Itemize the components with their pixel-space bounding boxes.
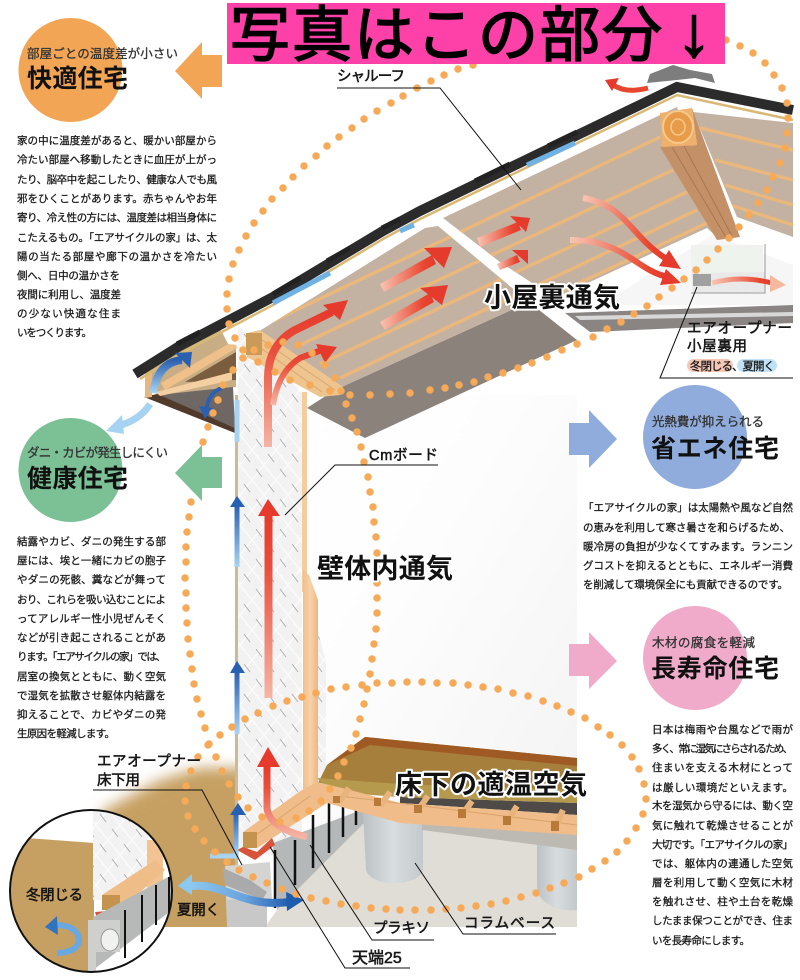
label: winter closed: 冬閉じる xyxy=(26,887,83,904)
callout: attic air opener xyxy=(660,287,793,378)
callout: attic air opener: 小屋裏用 xyxy=(687,338,747,355)
heading: 健康住宅 xyxy=(27,465,128,493)
roof underside left with rafters xyxy=(260,226,513,386)
foundation with vents xyxy=(223,803,367,927)
arrow pointing left xyxy=(175,445,222,501)
body text xyxy=(652,723,794,947)
column bases xyxy=(363,812,577,910)
label: summer open: 夏開く xyxy=(177,903,220,919)
arrow pointing left xyxy=(175,42,222,99)
callout: tenba 25 xyxy=(270,847,410,968)
arrow pointing right xyxy=(569,410,617,468)
body text: いを長寿命にします。 xyxy=(652,934,750,947)
body text xyxy=(17,535,166,740)
arrow: wall main xyxy=(258,499,280,698)
body text: 暖冷房の負担が少なくてすみます。ランニン xyxy=(583,540,793,553)
callout: Cm board xyxy=(285,447,438,515)
body text: 大切です。「エアサイクルの家」 xyxy=(652,838,793,851)
gable lattice wall xyxy=(600,235,793,305)
arrow: long curve 2 xyxy=(570,240,681,285)
inset detail circle xyxy=(9,809,173,973)
body text: グコストを抑えるとともに、エネルギー消費 xyxy=(583,559,793,572)
body text: 住まいを支える木材にとって xyxy=(652,761,793,774)
subtitle: 木材の腐食を軽減 xyxy=(652,635,755,650)
arrow: eave intake curving up xyxy=(153,352,192,393)
roof shingles xyxy=(135,87,793,379)
callout: Cm board: Cmボード xyxy=(369,447,438,464)
circle badge xyxy=(18,18,122,122)
inset winter arrow xyxy=(45,916,79,953)
body text xyxy=(583,501,794,591)
arrow: foundation intake upward xyxy=(210,803,246,856)
callout: underfloor air opener: エアオープナー xyxy=(97,753,201,770)
inset sill sealer xyxy=(95,911,104,916)
body text xyxy=(17,134,218,339)
body text: は厳しい環境だといえます。 xyxy=(652,781,793,794)
arrow: rafter 4 xyxy=(497,250,528,270)
callout: attic air opener: 冬閉じる、夏開く xyxy=(690,359,775,373)
body text: したまま保つことができ、住ま xyxy=(652,914,793,927)
arrow pointing right xyxy=(569,632,617,689)
body text: やダニの死骸、糞などが舞って xyxy=(17,573,166,586)
body text: 生原因を軽減します。 xyxy=(17,727,115,740)
callout: sha roof: シャルーフ xyxy=(337,69,405,85)
arrow: through air opener xyxy=(712,275,786,292)
panel: healthy house xyxy=(17,418,222,740)
title banner: 写真はこの部分 xyxy=(230,2,662,69)
subtitle: 部屋ごとの温度差が小さい xyxy=(27,46,178,61)
arrow: soffit small xyxy=(199,388,222,419)
body text: いをつくります。 xyxy=(17,327,92,339)
callout: column base: コラムベース xyxy=(464,916,555,932)
soil xyxy=(94,758,235,927)
body text: で湿気を拡散させ躯体内結露を xyxy=(17,689,166,702)
body text: たり、脳卒中を起こしたり、健康な人でも風 xyxy=(17,173,218,186)
dotted circles xyxy=(185,40,788,910)
arrow: outer wall middle xyxy=(230,496,245,567)
inset foundation xyxy=(93,875,172,970)
inset stud xyxy=(147,840,163,890)
arrow: lower wall xyxy=(257,747,307,837)
callout: underfloor air opener xyxy=(93,753,242,865)
heading: 長寿命住宅 xyxy=(651,655,779,683)
body text: 多く、常に湿気にさらされるため、 xyxy=(652,742,793,755)
label: underfloor air: 床下の適温空気 xyxy=(395,770,587,800)
arrow: outer wall lower xyxy=(230,661,245,734)
panel: energy saving house xyxy=(569,385,794,591)
arrow: rafter 2 xyxy=(380,285,448,330)
ridge vent xyxy=(647,65,715,83)
ridge beam xyxy=(660,108,740,240)
body text: 日本は梅雨や台風などで雨が xyxy=(652,723,794,736)
body text: おり、これらを吸い込むことによ xyxy=(17,594,166,606)
roof underside beyond ridge beam xyxy=(693,112,793,237)
body text: 居室の換気とともに、動く空気 xyxy=(17,670,166,683)
body text: 邪をひくことがあります。赤ちゃんやお年 xyxy=(17,192,217,205)
body text: 屋には、埃と一緒にカビの胞子 xyxy=(17,554,166,567)
body text: の少ない快適な住ま xyxy=(17,307,121,320)
arrow: summer through vent xyxy=(178,874,304,911)
body text: の恵みを利用して寒さ暑さを和らげるため、 xyxy=(583,521,790,534)
body text: などが引き起こされることがあ xyxy=(17,631,166,644)
body text: を触れさせ、柱や土台を乾燥 xyxy=(652,895,794,908)
concrete slab xyxy=(265,815,577,927)
callout: plakiso xyxy=(310,845,434,940)
inset vent xyxy=(88,920,120,975)
arrow: ridge exhaust xyxy=(605,78,648,91)
body text: ってアレルギー性小児ぜんそく xyxy=(17,612,166,625)
arrow: long curve 1 xyxy=(583,198,681,269)
label: attic ventilation: 小屋裏通気 xyxy=(484,283,620,313)
eave structure xyxy=(144,327,238,433)
body text: 木を湿気から守るには、動く空 xyxy=(652,799,793,812)
body text: 側へ、日中の温かさを xyxy=(17,269,120,282)
underfloor shadow xyxy=(422,817,577,850)
arrow: rafter 1 xyxy=(380,247,452,292)
top plate beam xyxy=(246,330,343,397)
wall with Cm board xyxy=(235,327,326,885)
red air arrows xyxy=(257,78,786,837)
heading: 省エネ住宅 xyxy=(651,435,779,463)
inset beam xyxy=(102,860,165,902)
callout: tenba 25: 天端25 xyxy=(352,949,402,967)
circle badge xyxy=(643,385,747,489)
circle badge xyxy=(18,418,122,522)
body text: 「エアサイクルの家」は太陽熱や風など自然 xyxy=(583,501,794,514)
heading: 快適住宅 xyxy=(27,65,128,93)
arrow: outer wall top xyxy=(234,400,240,442)
callout: underfloor air opener: 床下用 xyxy=(97,772,140,789)
grey ceiling xyxy=(307,302,577,438)
body text: 結露やカビ、ダニの発生する部 xyxy=(17,535,166,548)
body text: 家の中に温度差があると、暖かい部屋から xyxy=(17,134,217,147)
wood floor xyxy=(317,737,577,815)
body text: 寄り、冷え性の方には、温度差は相当身体に xyxy=(17,211,217,224)
circle badge xyxy=(643,606,747,710)
subtitle: ダニ・カビが発生しにくい xyxy=(27,445,168,460)
inset soil xyxy=(11,838,94,971)
arrow: top of wall branch xyxy=(273,344,337,405)
blue air arrows xyxy=(106,352,304,911)
body text: 抑えることで、カビやダニの発 xyxy=(17,708,166,721)
inset wall xyxy=(93,805,148,900)
inset beam end xyxy=(102,895,120,910)
panel: comfort house xyxy=(17,18,222,339)
callout: column base xyxy=(415,863,556,934)
body text: を削減して環境保全にも貢献できるのです。 xyxy=(583,578,788,591)
body text: 層を利用して動く空気に木材 xyxy=(652,876,794,889)
roof air opener box xyxy=(691,244,765,293)
floor sill and base beam xyxy=(237,782,577,860)
arrow: eave outlet xyxy=(106,404,150,434)
body text: ります。「エアサイクルの家」では、 xyxy=(17,650,166,663)
roof underside right with rafters xyxy=(443,107,720,294)
label: in-wall ventilation: 壁体内通気 xyxy=(317,554,453,584)
body text: 陽の当たる部屋や廊下の温かさを冷たい xyxy=(17,250,217,263)
subtitle: 光熱費が抑えられる xyxy=(652,414,764,429)
body text: こたえるもの。「エアサイクルの家」は、太 xyxy=(17,231,218,244)
callout: sha roof xyxy=(337,69,521,190)
arrow: rafter 3 xyxy=(477,216,530,247)
callout: plakiso: プラキソ xyxy=(373,920,430,937)
body text: 夜間に利用し、温度差 xyxy=(17,288,121,301)
attic floor beam xyxy=(565,305,793,332)
interior room wall xyxy=(306,395,577,835)
arrow: top of wall curving to roof xyxy=(268,300,348,447)
body text: では、躯体内の連通した空気 xyxy=(652,857,794,870)
panel: long life house xyxy=(569,606,794,947)
callout: attic air opener: エアオープナー xyxy=(687,320,792,337)
body text: 冷たい部屋へ移動したときに血圧が上がっ xyxy=(17,153,217,166)
body text: 気に触れて乾燥させることが xyxy=(652,819,794,832)
